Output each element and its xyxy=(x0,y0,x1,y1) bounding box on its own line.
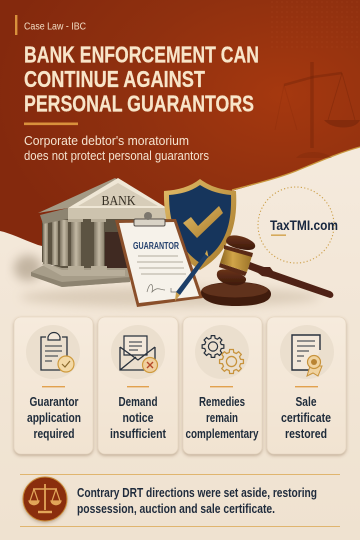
label: demand notice insufficient xyxy=(110,395,167,441)
label: sale certificate restored: restored xyxy=(285,427,327,441)
label: guarantor application required: required xyxy=(34,427,74,441)
illustration: shield xyxy=(164,179,236,270)
icon: certificate with ribbon xyxy=(280,325,334,379)
title rule xyxy=(24,122,78,125)
bank steps xyxy=(31,266,130,287)
bank entablature xyxy=(40,208,68,224)
icon: clipboard with check xyxy=(26,325,80,379)
label: guarantor application required: Guarantor xyxy=(30,395,79,409)
watermark: scales of justice xyxy=(275,62,360,158)
subtitle: Corporate debtor's moratorium xyxy=(24,134,189,148)
label: remedies remain complementary: complementary xyxy=(186,427,258,441)
gavel sound block xyxy=(201,282,271,306)
subtitle xyxy=(24,134,209,163)
footer text xyxy=(77,485,317,516)
dot pattern xyxy=(270,0,360,50)
bank columns xyxy=(43,219,104,267)
icon: envelope with cross xyxy=(111,325,165,379)
red header background xyxy=(0,0,360,249)
footer text: possession, auction and sale certificate. xyxy=(77,501,275,516)
gavel head xyxy=(217,270,246,285)
illustration: clipboard xyxy=(115,212,203,307)
card: guarantor application xyxy=(14,317,93,454)
footer icon: scales badge xyxy=(23,477,67,521)
gavel handle xyxy=(248,262,333,298)
title xyxy=(24,42,259,116)
illustration: bank building: BANK xyxy=(102,193,136,208)
bank roof xyxy=(38,178,118,213)
card: sale certificate xyxy=(267,317,346,454)
title: BANK ENFORCEMENT CAN xyxy=(24,42,259,68)
title: CONTINUE AGAINST xyxy=(24,66,205,92)
illustration shadow xyxy=(14,255,320,307)
illustration: clipboard: GUARANTOR xyxy=(133,241,180,252)
eyebrow: Case Law - IBC xyxy=(15,15,86,35)
footer band rules xyxy=(20,474,340,526)
eyebrow: Case Law - IBC: Case Law - IBC xyxy=(24,20,86,32)
card: demand notice xyxy=(98,317,178,454)
label: remedies remain complementary: remain xyxy=(206,411,238,425)
label: guarantor application required: application xyxy=(27,411,81,425)
label: sale certificate restored: certificate xyxy=(281,411,331,425)
label: demand notice insufficient: Demand xyxy=(118,395,158,409)
label: guarantor application required xyxy=(27,395,81,441)
label: remedies remain complementary xyxy=(186,395,258,441)
subtitle: does not protect personal guarantors xyxy=(24,149,209,163)
label: sale certificate restored xyxy=(281,395,331,441)
illustration: bank building xyxy=(31,178,167,287)
illustration: pen xyxy=(175,250,208,301)
label: sale certificate restored: Sale xyxy=(296,395,316,409)
card: remedies xyxy=(183,317,262,454)
gold curve accent xyxy=(232,147,360,190)
bank wall xyxy=(42,216,162,268)
label: demand notice insufficient: notice xyxy=(122,411,154,425)
label: demand notice insufficient: insufficient xyxy=(110,427,167,441)
icon: gears xyxy=(195,325,249,379)
label: remedies remain complementary: Remedies xyxy=(199,395,245,409)
logo: TaxTMI.com: TaxTMI.com xyxy=(270,217,338,233)
logo: TaxTMI.com xyxy=(258,187,338,263)
illustration: gavel xyxy=(201,235,333,306)
title: PERSONAL GUARANTORS xyxy=(24,90,254,116)
